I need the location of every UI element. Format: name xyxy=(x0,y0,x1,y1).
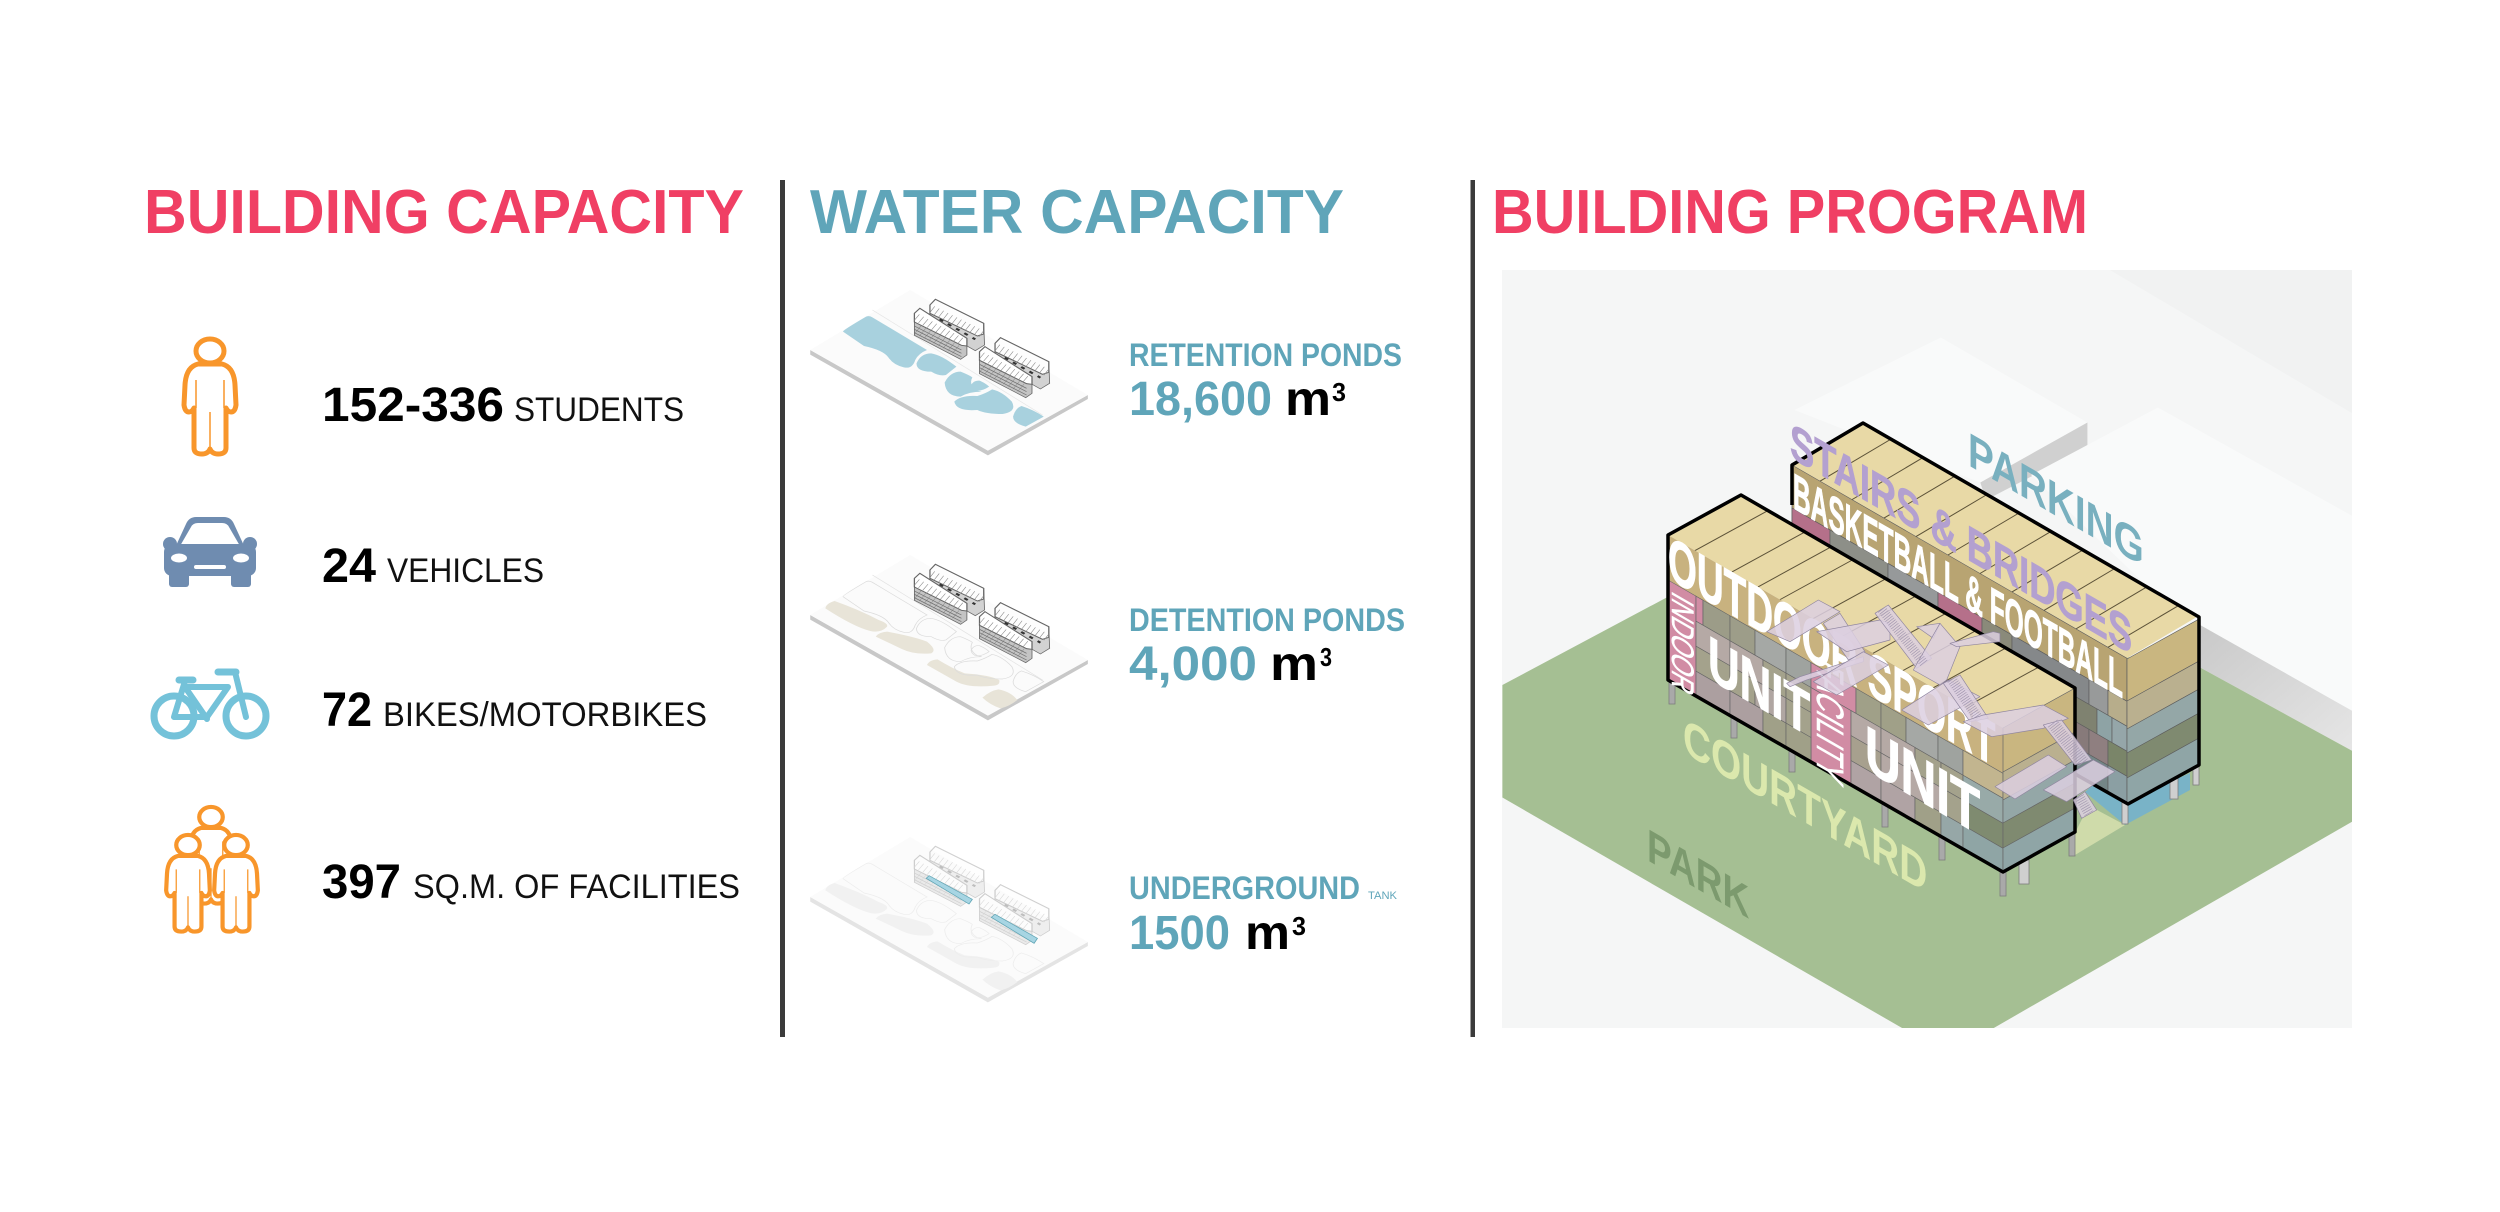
icon: bicycle xyxy=(154,672,266,736)
stairs and bridges xyxy=(1767,600,2115,818)
label: detention ponds: DETENTION PONDS xyxy=(1129,602,1405,638)
label: detention ponds: 4,000 xyxy=(1129,638,1257,691)
label: courtyard: COURTYARD xyxy=(1683,707,1927,904)
divider left xyxy=(780,180,785,1037)
label: park: PARK xyxy=(1647,818,1749,929)
divider right xyxy=(1470,180,1475,1037)
label: retention ponds: m xyxy=(1285,373,1331,426)
icon: group of people xyxy=(166,807,258,932)
diagram: underground tank xyxy=(810,837,1088,1002)
title: water capacity: WATER CAPACITY xyxy=(810,178,1344,247)
stat: vehicles: 24 xyxy=(322,540,376,593)
rear wall southwest xyxy=(1792,465,2127,803)
label: parking: PARKING xyxy=(1968,423,2144,578)
stilts xyxy=(1669,680,2199,896)
site blocks xyxy=(1502,422,2352,1028)
stat: vehicles: VEHICLES xyxy=(387,552,544,590)
label: facility: FACILITY xyxy=(1808,650,1851,793)
front roof xyxy=(1668,495,2076,728)
upper stairs xyxy=(1767,600,2000,725)
label: detention ponds: 3 xyxy=(1320,642,1332,672)
stat: vehicles xyxy=(322,540,544,593)
label: unit left: UNIT xyxy=(1708,623,1810,751)
courtyard and water patches xyxy=(2075,773,2190,855)
label: stairs and bridges: STAIRS & BRIDGES xyxy=(1790,412,2132,666)
label: underground tank: m xyxy=(1245,907,1290,960)
label: detention ponds xyxy=(1129,602,1405,691)
stat: facilities: 397 xyxy=(322,856,401,909)
lower stairs xyxy=(1963,705,2115,818)
label: underground tank xyxy=(1129,870,1398,960)
title: building program: BUILDING PROGRAM xyxy=(1492,178,2088,247)
panel: building program axonometric xyxy=(1502,270,2355,1032)
stat: facilities xyxy=(322,856,740,909)
rear building xyxy=(1792,423,2199,804)
label: retention ponds: RETENTION PONDS xyxy=(1129,337,1402,373)
label: underground tank: 3 xyxy=(1292,911,1306,941)
rear wall southeast xyxy=(2127,619,2199,804)
label: underground tank: TANK xyxy=(1368,890,1398,902)
stat: students: 152-336 xyxy=(322,379,504,432)
stat: students: STUDENTS xyxy=(514,391,684,429)
front outline xyxy=(1668,495,2075,872)
label: detention ponds: m xyxy=(1270,638,1318,691)
rear outline xyxy=(1792,423,2199,804)
label: underground tank: 1500 xyxy=(1129,907,1230,960)
label: basketball and football: BASKETBALL & FOOTBALL xyxy=(1793,462,2123,710)
icon: student person xyxy=(184,339,236,454)
rear roof xyxy=(1792,423,2198,658)
stat: bikes xyxy=(322,684,707,737)
stat: facilities: SQ.M. OF FACILITIES xyxy=(413,868,740,906)
icon: car xyxy=(163,517,257,587)
label: outdoor sport: OUTDOOR SPORT xyxy=(1668,523,1995,781)
front building xyxy=(1668,495,2076,873)
title: building capacity: BUILDING CAPACITY xyxy=(144,178,744,247)
front wall southwest xyxy=(1668,535,2003,873)
label: indoor: INDOOR xyxy=(1665,586,1701,703)
stat: bikes: BIKES/MOTORBIKES xyxy=(383,696,707,734)
label: retention ponds: 3 xyxy=(1332,377,1346,407)
park ground xyxy=(1502,592,2355,1032)
diagram: retention ponds xyxy=(810,290,1088,455)
diagram: detention ponds xyxy=(810,555,1088,720)
panel: building capacity list xyxy=(154,339,740,932)
label: unit right: UNIT xyxy=(1865,711,1980,850)
label: underground tank: UNDERGROUND xyxy=(1129,870,1360,906)
label: retention ponds: 18,600 xyxy=(1129,373,1272,426)
front wall southeast xyxy=(2003,688,2075,872)
stat: students xyxy=(322,379,684,432)
label: retention ponds xyxy=(1129,337,1402,426)
stat: bikes: 72 xyxy=(322,684,372,737)
